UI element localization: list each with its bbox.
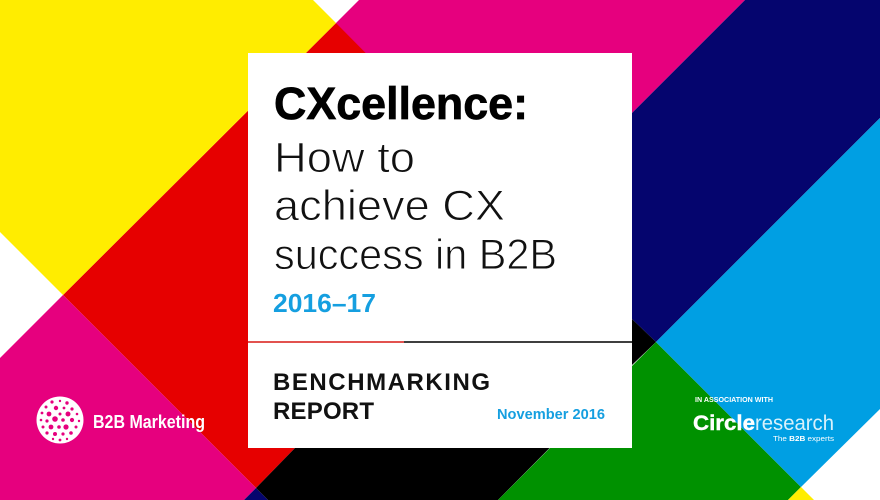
background: green band (498, 342, 801, 500)
heading: CXcellence: CXcellence: (274, 78, 528, 129)
panel: white title card (248, 53, 632, 448)
partner wordmark: Circle (693, 412, 755, 435)
background: black band (256, 300, 656, 500)
background: magenta lower-left (0, 295, 256, 500)
background: small yellow triangle (788, 487, 814, 500)
subtitle: how to achieve CX success in B2B: How to (274, 134, 415, 182)
background: red band (63, 23, 500, 488)
background: navy band (500, 0, 880, 342)
background: magenta top band (336, 0, 745, 250)
report label (273, 369, 490, 425)
partner wordmark (693, 412, 834, 435)
icon: B2B Marketing dotted globe (36, 396, 84, 444)
report label: BENCHMARKING (273, 369, 490, 396)
divider rule (248, 341, 632, 343)
partner caption: IN ASSOCIATION WITH (695, 397, 773, 404)
logo: B2B Marketing (36, 396, 205, 444)
logo wordmark: B2B Marketing (93, 412, 205, 432)
year label: 2016–17 (273, 288, 376, 318)
background: small navy triangle (244, 488, 268, 500)
subtitle: how to achieve CX success in B2B: achieve CX (274, 182, 505, 230)
background: yellow corner (0, 0, 336, 295)
date label: November 2016 (497, 407, 605, 423)
partner wordmark: research (755, 412, 834, 435)
background: blue band (656, 118, 880, 487)
report label: REPORT (273, 398, 374, 425)
subtitle: how to achieve CX success in B2B: success in B2B (274, 231, 557, 279)
subtitle: how to achieve CX success in B2B (274, 134, 557, 279)
logo: Circle Research partner (693, 397, 834, 443)
partner tagline: The B2B experts (773, 434, 834, 443)
